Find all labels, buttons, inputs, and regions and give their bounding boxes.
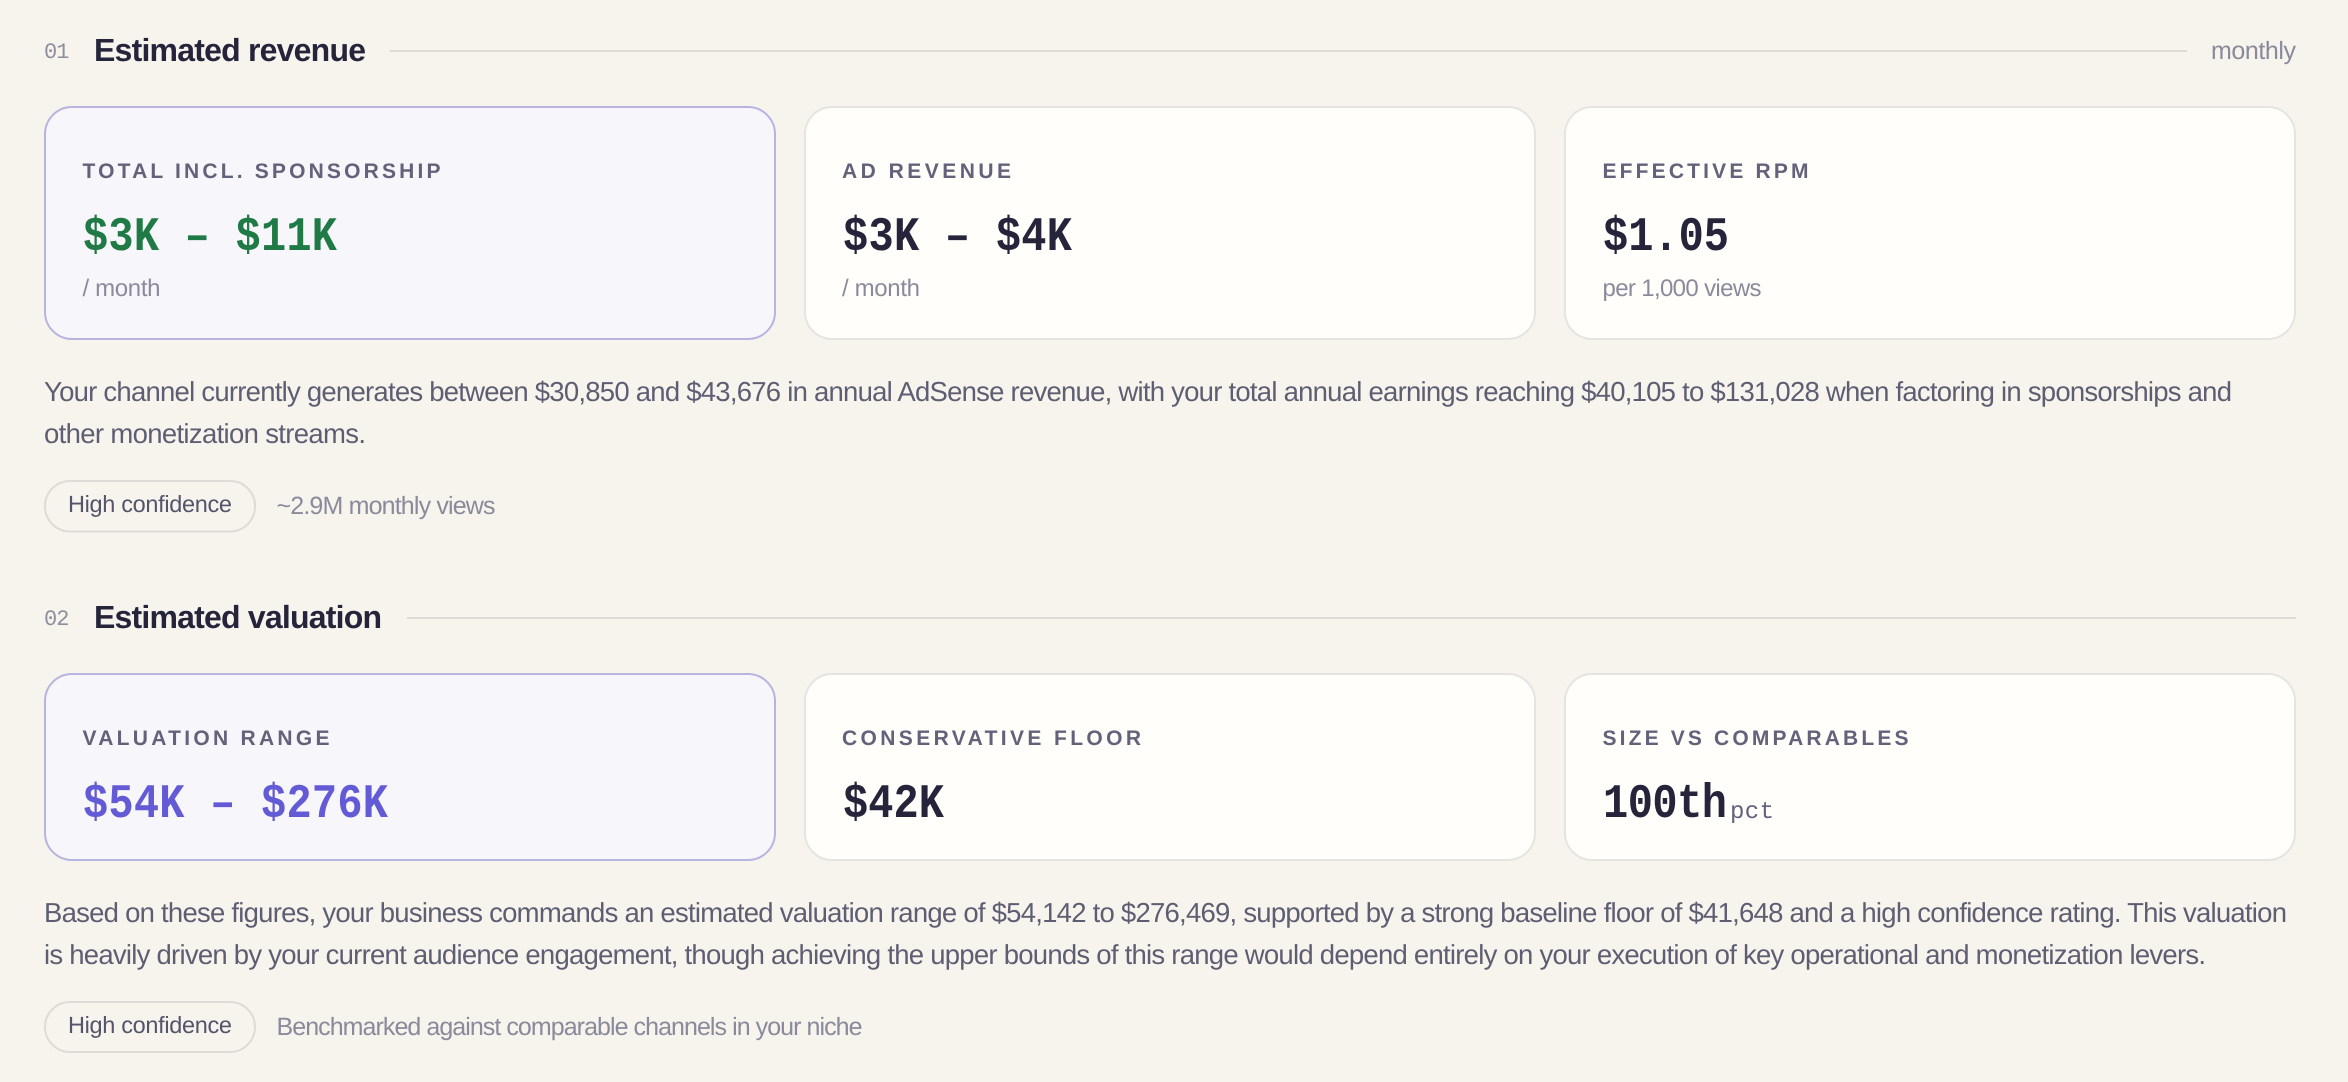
panel: total including sponsorship: TOTAL INCL. SPONSORSHIP [82, 160, 440, 183]
section heading: estimated revenue: monthly [2211, 37, 2296, 65]
section: estimated valuation [44, 599, 2296, 1052]
text block: revenue summary: Your channel currently generates between $30,850 and $43,676 in annual AdSense revenue, with your total annual earnings reaching $40,105 to $131,028 when factoring in sponsorships and [44, 376, 2232, 407]
section: estimated revenue [44, 32, 2296, 532]
panel: total including sponsorship [45, 107, 775, 339]
badge: high confidence: High confidence [68, 491, 232, 517]
section heading: estimated valuation: 02 [44, 607, 70, 632]
panel: total including sponsorship: / month [82, 275, 160, 302]
badge: high confidence [45, 481, 255, 532]
panel: conservative floor: $42K [843, 777, 945, 832]
section heading: estimated revenue: 01 [44, 40, 70, 65]
badge: high confidence [45, 1002, 255, 1052]
note: monthly views: ~2.9M monthly views [276, 492, 496, 520]
panel: effective RPM: $1.05 [1603, 210, 1729, 265]
text block: valuation summary: Based on these figures, your business commands an estimated valuation range of $54,142 to $276,469, supported by a strong baseline floor of $41,648 and a high confidence rating. This valuation [44, 897, 2287, 928]
panel: ad revenue: / month [842, 275, 920, 302]
panel: valuation range: VALUATION RANGE [82, 727, 330, 750]
panel: size vs comparables: 100th [1603, 777, 1727, 832]
section heading: estimated revenue [44, 32, 2296, 68]
section heading: estimated valuation: Estimated valuation [94, 599, 382, 635]
panel: size vs comparables: SIZE VS COMPARABLES [1602, 727, 1908, 750]
badge: high confidence: High confidence [68, 1012, 232, 1038]
section heading: estimated valuation [44, 599, 2296, 635]
text block: valuation summary [44, 897, 2287, 970]
text block: revenue summary [44, 376, 2232, 449]
panel: size vs comparables: pct [1730, 799, 1774, 826]
panel: valuation range [45, 674, 775, 860]
panel: conservative floor [805, 674, 1535, 860]
panel: valuation range: $54K – $276K [83, 777, 389, 832]
panel: ad revenue [805, 107, 1535, 339]
panel: effective RPM: EFFECTIVE RPM [1602, 160, 1808, 183]
text block: revenue summary: other monetization streams. [44, 418, 366, 449]
panel: size vs comparables [1565, 674, 2295, 860]
panel: ad revenue: $3K – $4K [843, 210, 1073, 265]
note: benchmark source: Benchmarked against comparable channels in your niche [276, 1013, 862, 1041]
panel: conservative floor: CONSERVATIVE FLOOR [842, 727, 1141, 750]
panel: effective RPM: per 1,000 views [1602, 275, 1762, 302]
section heading: estimated revenue: Estimated revenue [94, 32, 366, 68]
panel: ad revenue: AD REVENUE [842, 160, 1011, 183]
text block: valuation summary: is heavily driven by your current audience engagement, though achieving the upper bounds of this range would depend entirely on your execution of key operational and monetization levers. [44, 939, 2206, 970]
panel: total including sponsorship: $3K – $11K [83, 210, 338, 265]
panel: effective RPM [1565, 107, 2295, 339]
